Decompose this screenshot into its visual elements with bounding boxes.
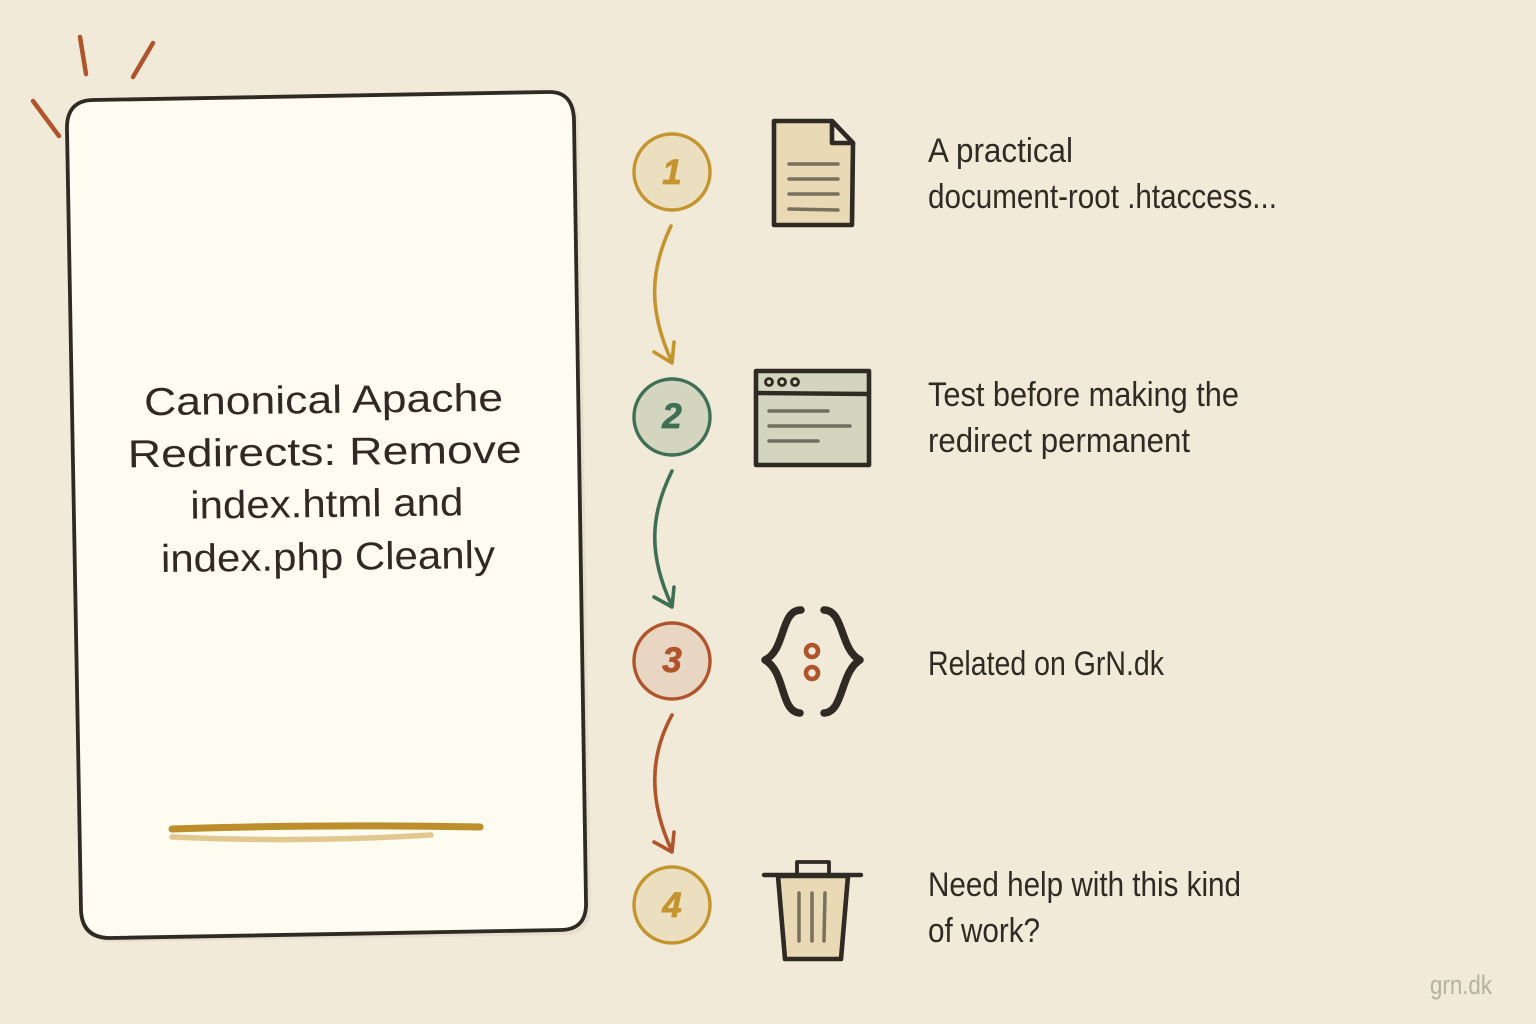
step 3 badge: 3 [662,641,682,680]
text: step 1 [928,132,1277,216]
step 4 badge: 4 [661,886,682,925]
title text [127,377,523,581]
icon: code braces [765,610,860,713]
text: step 2: redirect permanent [928,422,1190,460]
step 4 badge [634,867,710,943]
title text: index.php Cleanly [161,534,496,581]
step 2 badge: 2 [661,397,682,436]
watermark: grn.dk [1430,970,1492,1000]
icon: document [774,121,853,225]
arrow 3 to 4 [654,715,674,852]
step 3 badge [634,623,710,699]
title underline [172,826,480,840]
text: step 3: Related on GrN.dk [928,645,1165,683]
title text: Redirects: Remove [127,429,522,476]
text: step 2: Test before making the [928,376,1239,414]
arrow 2 to 3 [654,471,674,607]
title text: index.html and [190,481,464,528]
icon: browser window [756,371,869,465]
panel: title card [67,92,591,942]
step 2 badge [634,379,710,455]
arrow 1 to 2 [654,226,674,363]
title text: Canonical Apache [144,377,503,424]
text: step 1: A practical [928,132,1073,170]
text: step 1: document-root .htaccess... [928,178,1277,216]
text: step 4: of work? [928,912,1040,950]
text: step 4 [928,866,1241,950]
icon: trash can [764,862,861,959]
text: step 4: Need help with this kind [928,866,1241,904]
step 1 badge [634,134,710,210]
text: step 2 [928,376,1239,460]
accent marks: burst at card corner [33,37,153,136]
step 1 badge: 1 [662,153,682,192]
